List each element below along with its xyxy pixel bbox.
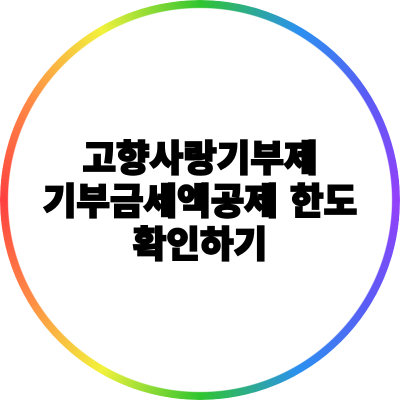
title: 확인하기: [133, 224, 267, 265]
title: 고향사랑기부제: [82, 138, 318, 179]
title: 기부금세액공제 한도: [43, 181, 357, 222]
title: [42, 138, 357, 265]
